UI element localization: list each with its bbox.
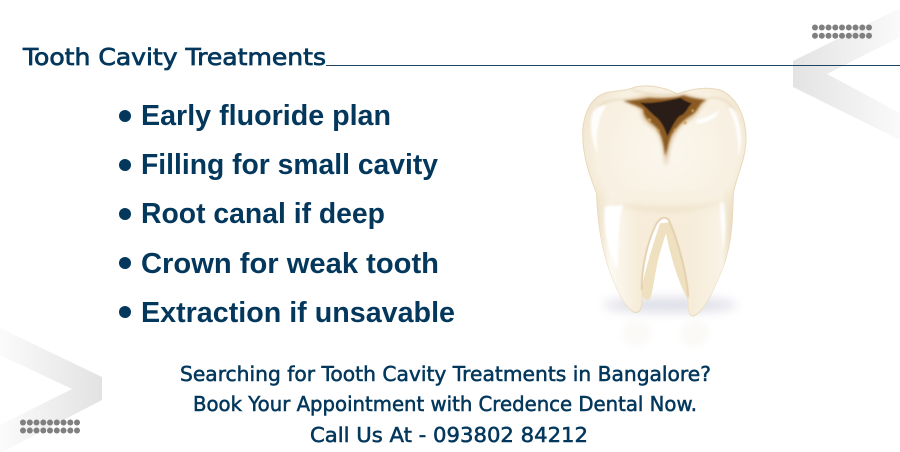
- list item: filling: Filling for small cavity: [141, 149, 438, 181]
- call to action: line 1: Searching for Tooth Cavity Treatments in Bangalore?: [180, 362, 711, 386]
- call to action: line 2: Book Your Appointment with Credence Dental Now.: [193, 392, 697, 416]
- icon: decayed molar tooth: [582, 85, 746, 316]
- cavity: brown stain: [623, 95, 707, 156]
- decorative chevron: bottom left: [0, 328, 102, 452]
- cavity: speckles: [648, 109, 694, 132]
- back root: [642, 222, 691, 300]
- call to action: [180, 362, 711, 447]
- neck shading: [603, 198, 728, 212]
- cavity: dark hole: [640, 98, 692, 136]
- tooth reflection: [622, 320, 710, 347]
- list item: extraction: Extraction if unsavable: [141, 297, 455, 329]
- list item: early fluoride plan: Early fluoride plan: [141, 100, 391, 132]
- list item: root canal: Root canal if deep: [141, 198, 385, 230]
- crown ridges: [593, 89, 735, 110]
- root shading: [597, 190, 733, 315]
- root fork rim: [642, 218, 688, 297]
- decorative chevron: top right: [793, 8, 900, 140]
- dot grid: bottom left: [20, 420, 80, 434]
- ground shadow: [603, 298, 737, 312]
- treatment list: [119, 100, 455, 329]
- call to action: line 3: Call Us At - 093802 84212: [310, 423, 588, 447]
- dot grid: top right: [812, 24, 872, 39]
- title rule: [326, 65, 900, 66]
- list item: crown: Crown for weak tooth: [141, 248, 439, 280]
- highlights: [591, 105, 741, 270]
- cavity: soft stain halo: [625, 95, 707, 167]
- tooth body: [583, 86, 746, 316]
- title: Tooth Cavity Treatments: [22, 43, 326, 71]
